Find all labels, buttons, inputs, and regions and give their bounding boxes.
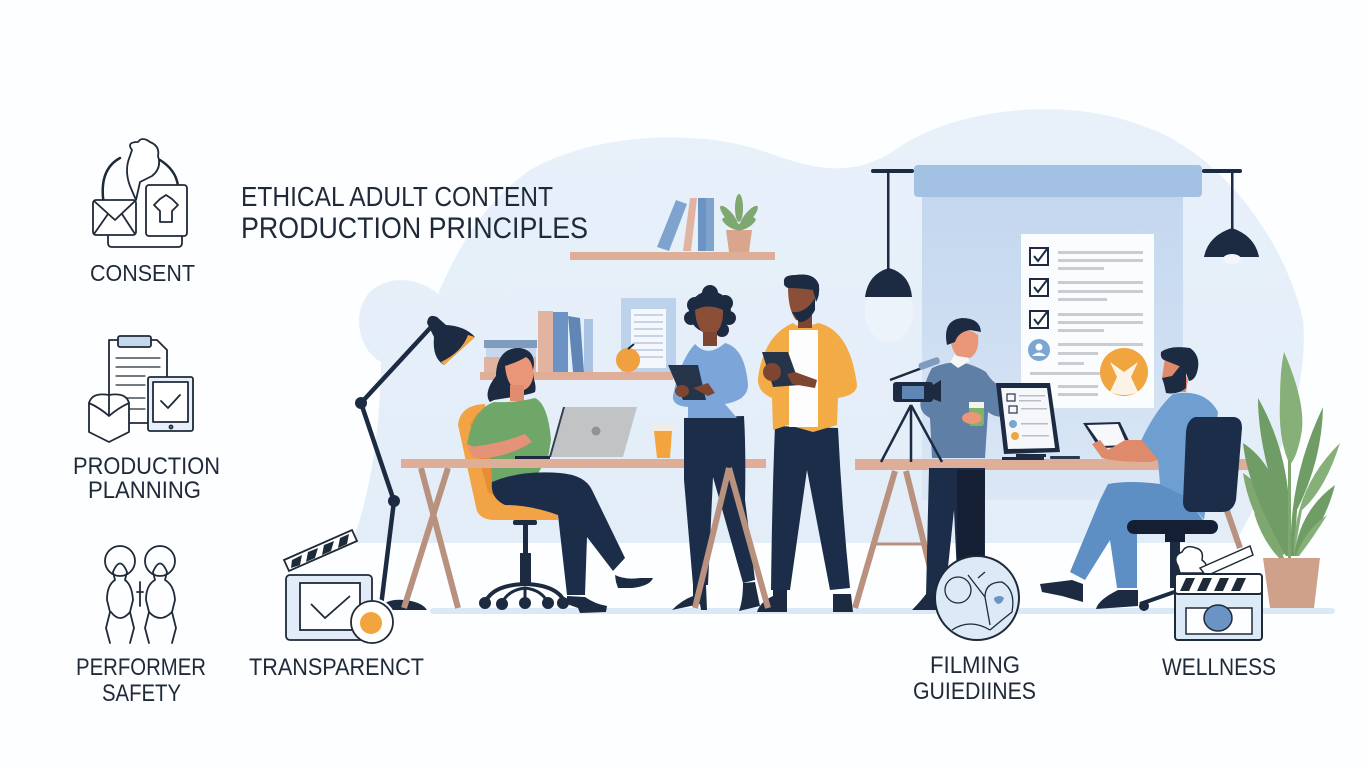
- man seated with tablet: [1040, 347, 1242, 611]
- label: performer safety: PERFORMER: [76, 654, 206, 681]
- icon: production planning: [89, 336, 193, 442]
- chair: [458, 404, 569, 610]
- title: [241, 181, 588, 245]
- label: production planning: [73, 453, 220, 504]
- label: performer safety: SAFETY: [102, 680, 181, 707]
- icon: consent: [93, 139, 187, 247]
- shirt: [467, 398, 551, 483]
- monitor: [996, 383, 1080, 460]
- desktop left top and coffee cup: [401, 426, 766, 468]
- label: wellness: WELLNESS: [1162, 654, 1276, 681]
- man standing in yellow cardigan: [757, 274, 857, 612]
- checklist document: [1021, 234, 1154, 408]
- woman seated with laptop: [458, 348, 653, 613]
- lower shelf with books, document and orange: [480, 298, 676, 380]
- title: PRODUCTION PRINCIPLES: [241, 212, 588, 245]
- label: filming guidelines: GUIEDIINES: [913, 678, 1036, 705]
- white backing patches: [348, 598, 396, 646]
- top shelf with books and plant: [570, 194, 775, 260]
- woman standing with tablet: [668, 285, 760, 611]
- camera on tripod: [881, 356, 942, 462]
- background blob: [352, 109, 1304, 543]
- label: consent: CONSENT: [90, 260, 195, 286]
- desk left legs: [404, 468, 458, 608]
- hair: [488, 348, 536, 402]
- label: filming guidelines: [913, 652, 1036, 705]
- torso: [1140, 393, 1218, 520]
- label: transparency: TRANSPARENCT: [249, 654, 424, 681]
- label: production planning: PLANNING: [88, 477, 201, 504]
- laptop: [549, 407, 637, 457]
- legs: [1070, 482, 1203, 588]
- tablet: [1083, 422, 1132, 448]
- legs: [492, 472, 625, 595]
- icon: transparency clapperboard: [284, 530, 393, 643]
- projection screen and roller: [871, 165, 1242, 500]
- desk left right legs: [695, 468, 768, 608]
- icon: wellness clapperboard: [1175, 546, 1262, 640]
- label: performer safety: [76, 654, 206, 707]
- title: ETHICAL ADULT CONTENT: [241, 181, 553, 212]
- label: production planning: PRODUCTION: [73, 453, 220, 480]
- pendant lamp right: [1204, 172, 1259, 264]
- chair: [1127, 417, 1242, 611]
- desk right: [855, 459, 1258, 608]
- icon: filming guidelines globe: [935, 556, 1019, 640]
- icon: performer safety: [105, 546, 176, 643]
- man with camera: [912, 318, 1022, 610]
- floor shadow: [430, 608, 1335, 614]
- pendant lamp left: [865, 172, 913, 342]
- head: [1162, 358, 1188, 392]
- floor lamp: [355, 316, 475, 610]
- potted plant: [1243, 352, 1340, 608]
- label: filming guidelines: FILMING: [930, 652, 1020, 679]
